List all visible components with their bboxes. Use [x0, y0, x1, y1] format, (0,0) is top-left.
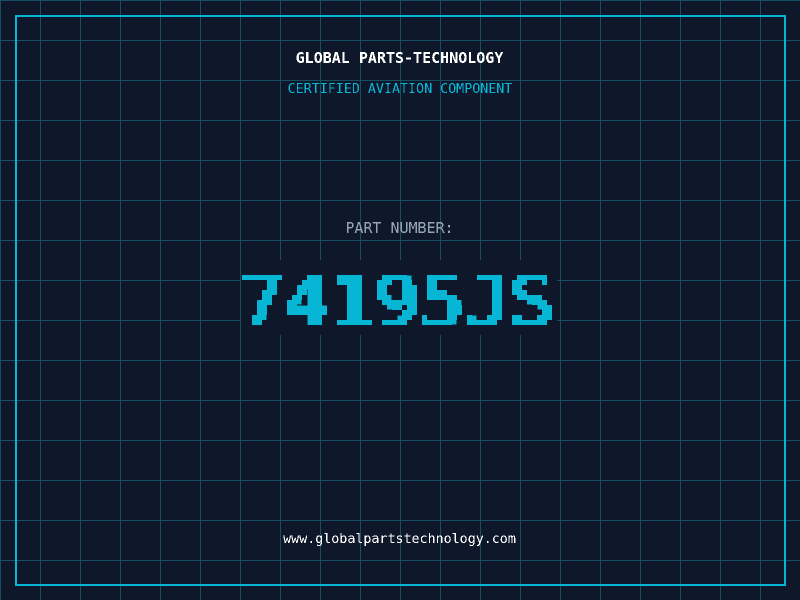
part number backing panel: [241, 260, 557, 335]
part number value: 74195JS: [240, 261, 555, 341]
title: GLOBAL PARTS-TECHNOLOGY: [296, 49, 503, 67]
part number label: PART NUMBER:: [345, 219, 454, 237]
website url: www.globalpartstechnology.com: [283, 532, 516, 547]
subtitle: CERTIFIED AVIATION COMPONENT: [288, 82, 512, 97]
